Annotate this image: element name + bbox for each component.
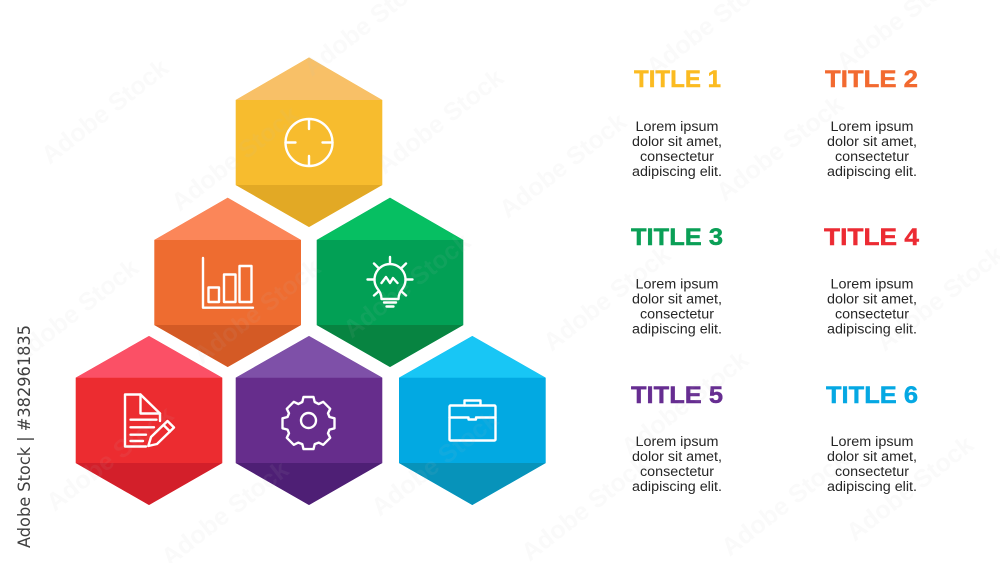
block: title 6: Lorem ipsum xyxy=(830,434,914,450)
block: title 1: consectetur xyxy=(640,149,714,165)
watermark pattern: Adobe Stock xyxy=(166,101,304,217)
stock id side label: Adobe Stock | #382961835 xyxy=(15,325,34,548)
block: title 1: adipiscing elit. xyxy=(632,164,722,180)
block: title 5: adipiscing elit. xyxy=(632,479,722,495)
watermark pattern: Adobe Stock xyxy=(616,346,754,462)
block: title 2 xyxy=(825,66,918,180)
block: title 5: TITLE 5 xyxy=(631,382,723,409)
block: title 4: dolor sit amet, xyxy=(827,292,917,308)
block: title 2: Lorem ipsum xyxy=(830,119,914,135)
hexagon 5: purple xyxy=(236,336,382,505)
block: title 1: dolor sit amet, xyxy=(632,134,722,150)
watermark pattern: Adobe Stock xyxy=(494,108,632,224)
block: title 4 xyxy=(824,224,919,338)
hexagon 3: green xyxy=(317,198,463,367)
hexagon 1: yellow xyxy=(236,58,382,227)
block: title 6: dolor sit amet, xyxy=(827,449,917,465)
watermark pattern: Adobe Stock xyxy=(41,401,179,517)
block: title 4: TITLE 4 xyxy=(824,224,919,251)
watermark pattern: Adobe Stock xyxy=(338,228,476,344)
block: title 1 xyxy=(632,66,722,180)
hexagon 2: orange xyxy=(154,198,301,367)
block: title 1: Lorem ipsum xyxy=(636,119,718,135)
block: title 3: TITLE 3 xyxy=(631,224,723,251)
watermark pattern: Adobe Stock xyxy=(371,64,509,180)
icon: bar chart xyxy=(203,258,253,308)
block: title 5: Lorem ipsum xyxy=(636,434,718,450)
block: title 6: TITLE 6 xyxy=(826,382,918,409)
watermark pattern: Adobe Stock xyxy=(711,91,849,207)
block: title 3: adipiscing elit. xyxy=(632,322,722,338)
watermark pattern: Adobe Stock xyxy=(366,406,504,522)
block: title 6: consectetur xyxy=(835,464,909,480)
icon: briefcase xyxy=(450,400,496,440)
block: title 3: dolor sit amet, xyxy=(632,292,722,308)
block: title 5: consectetur xyxy=(640,464,714,480)
block: title 2: adipiscing elit. xyxy=(827,164,917,180)
watermark pattern: Adobe Stock xyxy=(6,254,144,370)
watermark pattern: Adobe Stock xyxy=(538,241,676,357)
block: title 5 xyxy=(631,382,723,495)
block: title 4: adipiscing elit. xyxy=(827,322,917,338)
block: title 6 xyxy=(826,382,918,495)
icon: document with pencil xyxy=(125,394,174,446)
block: title 6: adipiscing elit. xyxy=(827,479,917,495)
icon: gear xyxy=(282,397,334,449)
icon: target crosshair xyxy=(286,119,332,166)
watermark pattern: Adobe Stock xyxy=(36,54,174,170)
block: title 4: Lorem ipsum xyxy=(830,276,914,292)
block: title 1: TITLE 1 xyxy=(634,66,721,93)
block: title 4: consectetur xyxy=(835,306,909,322)
block: title 3 xyxy=(631,224,723,338)
block: title 2: consectetur xyxy=(835,149,909,165)
block: title 3: Lorem ipsum xyxy=(636,276,718,292)
hexagon 4: red xyxy=(76,336,222,505)
block: title 2: TITLE 2 xyxy=(825,66,918,93)
watermark pattern: Adobe Stock xyxy=(716,446,854,562)
block: title 5: dolor sit amet, xyxy=(632,449,722,465)
block: title 2: dolor sit amet, xyxy=(827,134,917,150)
block: title 3: consectetur xyxy=(640,306,714,322)
watermark pattern: Adobe Stock xyxy=(188,254,326,370)
watermark pattern: Adobe Stock xyxy=(841,431,979,547)
hexagon 6: blue xyxy=(399,336,546,505)
icon: light bulb xyxy=(368,257,412,306)
